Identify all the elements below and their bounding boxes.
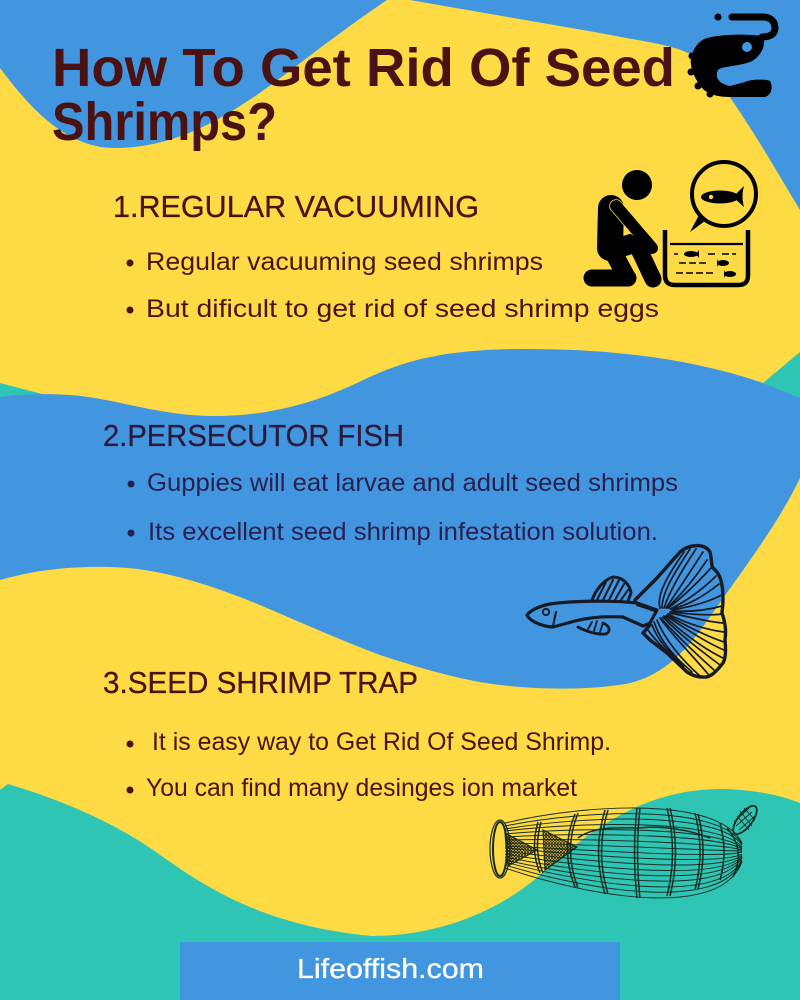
icon: shrimp xyxy=(688,14,775,98)
background: top-left blue wave xyxy=(0,0,387,148)
background: right teal wedge xyxy=(763,352,800,400)
bullet list: seed shrimp trap: It is easy way to Get Rid Of Seed Shrimp. xyxy=(152,728,611,756)
background: middle blue wave xyxy=(0,349,800,689)
bullet list: regular vacuuming xyxy=(126,248,659,323)
bullet list: regular vacuuming: Regular vacuuming seed shrimps xyxy=(146,248,543,276)
background: bottom teal wave xyxy=(0,784,800,1000)
heading: persecutor fish: 2.PERSECUTOR FISH xyxy=(103,418,404,453)
bullet list: seed shrimp trap: You can find many desinges ion market xyxy=(146,774,577,802)
icon: fish trap xyxy=(490,802,761,898)
footer banner xyxy=(180,942,620,1000)
background: left teal wedge xyxy=(0,383,50,398)
bullet list: persecutor fish: Its excellent seed shrimp infestation solution. xyxy=(148,518,658,546)
heading: seed shrimp trap: 3.SEED SHRIMP TRAP xyxy=(103,665,418,700)
bullet list: persecutor fish xyxy=(128,469,678,546)
icon: person at aquarium xyxy=(592,162,756,285)
bullet list: seed shrimp trap xyxy=(126,728,611,802)
title: How To Get Rid Of Seed xyxy=(52,38,675,98)
title xyxy=(52,38,675,152)
background: top-right blue shape xyxy=(410,0,800,210)
footer banner: Lifeoffish.com xyxy=(297,953,484,984)
bullet list: persecutor fish: Guppies will eat larvae and adult seed shrimps xyxy=(147,469,678,497)
heading: regular vacuuming: 1.REGULAR VACUUMING xyxy=(113,189,479,224)
title: Shrimps? xyxy=(52,92,277,152)
bullet list: regular vacuuming: But dificult to get rid of seed shrimp eggs xyxy=(146,295,659,323)
icon: guppy fish xyxy=(527,546,726,677)
